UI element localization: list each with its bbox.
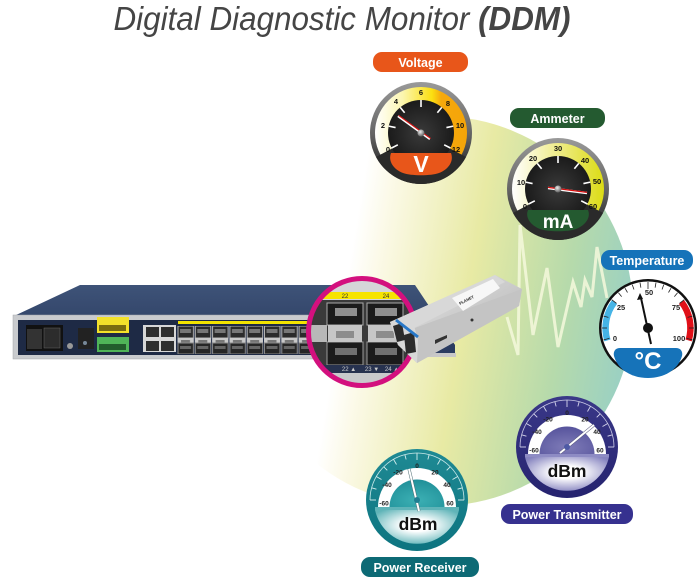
gauge: Temperature: °C — [635, 348, 661, 375]
gauge: Voltage: 10 — [456, 121, 464, 130]
gauge: Voltage: V — [413, 151, 429, 177]
gauge: Power Receiver: -20 — [393, 470, 403, 476]
gauge: Power Transmitter: dBm — [548, 461, 586, 481]
side slot — [435, 335, 447, 344]
gauge: Temperature: 100 — [673, 334, 685, 343]
label: Power Transmitter: Power Transmitter — [512, 508, 622, 522]
gauge: Ammeter: 40 — [581, 156, 589, 165]
label: Ammeter: Ammeter — [530, 112, 585, 126]
green terminal block — [97, 337, 129, 352]
blue latch — [396, 320, 418, 337]
gauge: Ammeter — [507, 138, 609, 240]
power socket — [26, 325, 63, 351]
gauge: Power Receiver: dBm — [399, 514, 437, 534]
module front openings — [390, 318, 418, 363]
magnified SFP ports lens: 23 ▼ — [365, 367, 379, 373]
yellow port strip — [178, 321, 328, 324]
temperature needle — [637, 293, 653, 344]
port numbers: 22 — [342, 294, 349, 300]
magnified SFP ports lens: 24 ▲ — [385, 367, 399, 373]
gauge: Temperature — [599, 279, 697, 378]
gauge: Power Receiver: 40 — [443, 482, 451, 489]
label: Power Receiver: Power Receiver — [373, 561, 467, 575]
gauge: Power Receiver: 0 — [415, 463, 419, 470]
yellow strip — [323, 292, 401, 299]
background gradient circle — [243, 116, 633, 506]
gauge: Power Transmitter: -40 — [532, 429, 542, 436]
module label sticker — [452, 279, 500, 311]
SFP transceiver module: PLANET — [458, 294, 475, 306]
gauge: Power Receiver: 20 — [431, 470, 439, 476]
gauge: Temperature: 75 — [672, 303, 680, 312]
gauge: Voltage: 2 — [381, 121, 385, 130]
title: Digital Diagnostic Monitor (DDM) — [114, 0, 571, 37]
label: Temperature: Temperature — [610, 254, 684, 268]
RJ45 ports — [143, 325, 176, 352]
gauge: Power Receiver: -60 — [379, 500, 389, 508]
gauge: Ammeter: 20 — [529, 154, 537, 163]
gauge: Power Transmitter: -20 — [543, 416, 553, 424]
gauge: Power Transmitter: 20 — [581, 416, 589, 424]
gauge: Voltage: 0 — [386, 145, 390, 154]
SFP transceiver module — [390, 275, 522, 363]
gauge: Voltage: 12 — [452, 145, 460, 154]
gauge: Ammeter: 10 — [517, 178, 525, 187]
magnified port columns — [312, 300, 410, 365]
transmitter needle — [560, 425, 594, 453]
ammeter needle — [548, 186, 587, 193]
receiver needle — [409, 469, 420, 511]
gauge: Ammeter: 50 — [593, 177, 601, 186]
network switch — [13, 285, 456, 359]
gauge: Power Receiver: 60 — [446, 500, 454, 508]
gauge: Power Transmitter: 0 — [565, 410, 569, 417]
ground screw — [67, 343, 73, 349]
label: Power Transmitter — [501, 504, 633, 524]
gauge: Ammeter: 30 — [554, 144, 562, 153]
temperature unit cap — [614, 348, 682, 378]
switch front face — [13, 315, 333, 359]
ammeter unit cap — [527, 210, 589, 231]
gauge: Power Transmitter: 60 — [596, 448, 604, 454]
gauge: Temperature: 25 — [617, 303, 625, 312]
magnified SFP ports lens: 22 ▲ — [342, 367, 356, 373]
label: Voltage: Voltage — [398, 56, 443, 70]
label: Voltage — [373, 52, 468, 72]
gauge: Ammeter: 0 — [523, 202, 527, 211]
gauge: Voltage: 8 — [446, 99, 450, 108]
gauge: Voltage — [370, 82, 472, 184]
label: Ammeter — [510, 108, 605, 128]
gauge: Temperature: 50 — [645, 288, 653, 297]
signal waveform line — [507, 225, 607, 355]
voltage unit cap — [390, 153, 452, 175]
label: Temperature — [601, 250, 693, 270]
power switch — [78, 328, 94, 349]
label: Power Receiver — [361, 557, 479, 577]
magnified SFP ports lens — [305, 278, 416, 393]
gauge: Ammeter: 60 — [589, 202, 597, 211]
bottom strip — [324, 365, 401, 373]
gauge: Power Receiver — [366, 449, 468, 551]
gauge: Power Transmitter: 40 — [593, 429, 601, 436]
gauge: Power Receiver: -40 — [382, 482, 392, 489]
gauge: Power Transmitter — [516, 396, 618, 498]
gauge: Voltage: 6 — [419, 88, 423, 97]
switch top face — [14, 285, 455, 345]
switch rear extension — [400, 300, 455, 357]
gauge: Ammeter: mA — [543, 212, 574, 233]
gauge: Power Transmitter: -60 — [529, 448, 539, 454]
gauge: Temperature: 0 — [613, 334, 617, 343]
SFP ports row — [177, 326, 333, 354]
gauge: Voltage: 4 — [394, 97, 399, 106]
magnified SFP ports lens: 24 — [383, 294, 390, 300]
yellow terminal block — [97, 317, 129, 333]
voltage needle — [398, 115, 431, 139]
